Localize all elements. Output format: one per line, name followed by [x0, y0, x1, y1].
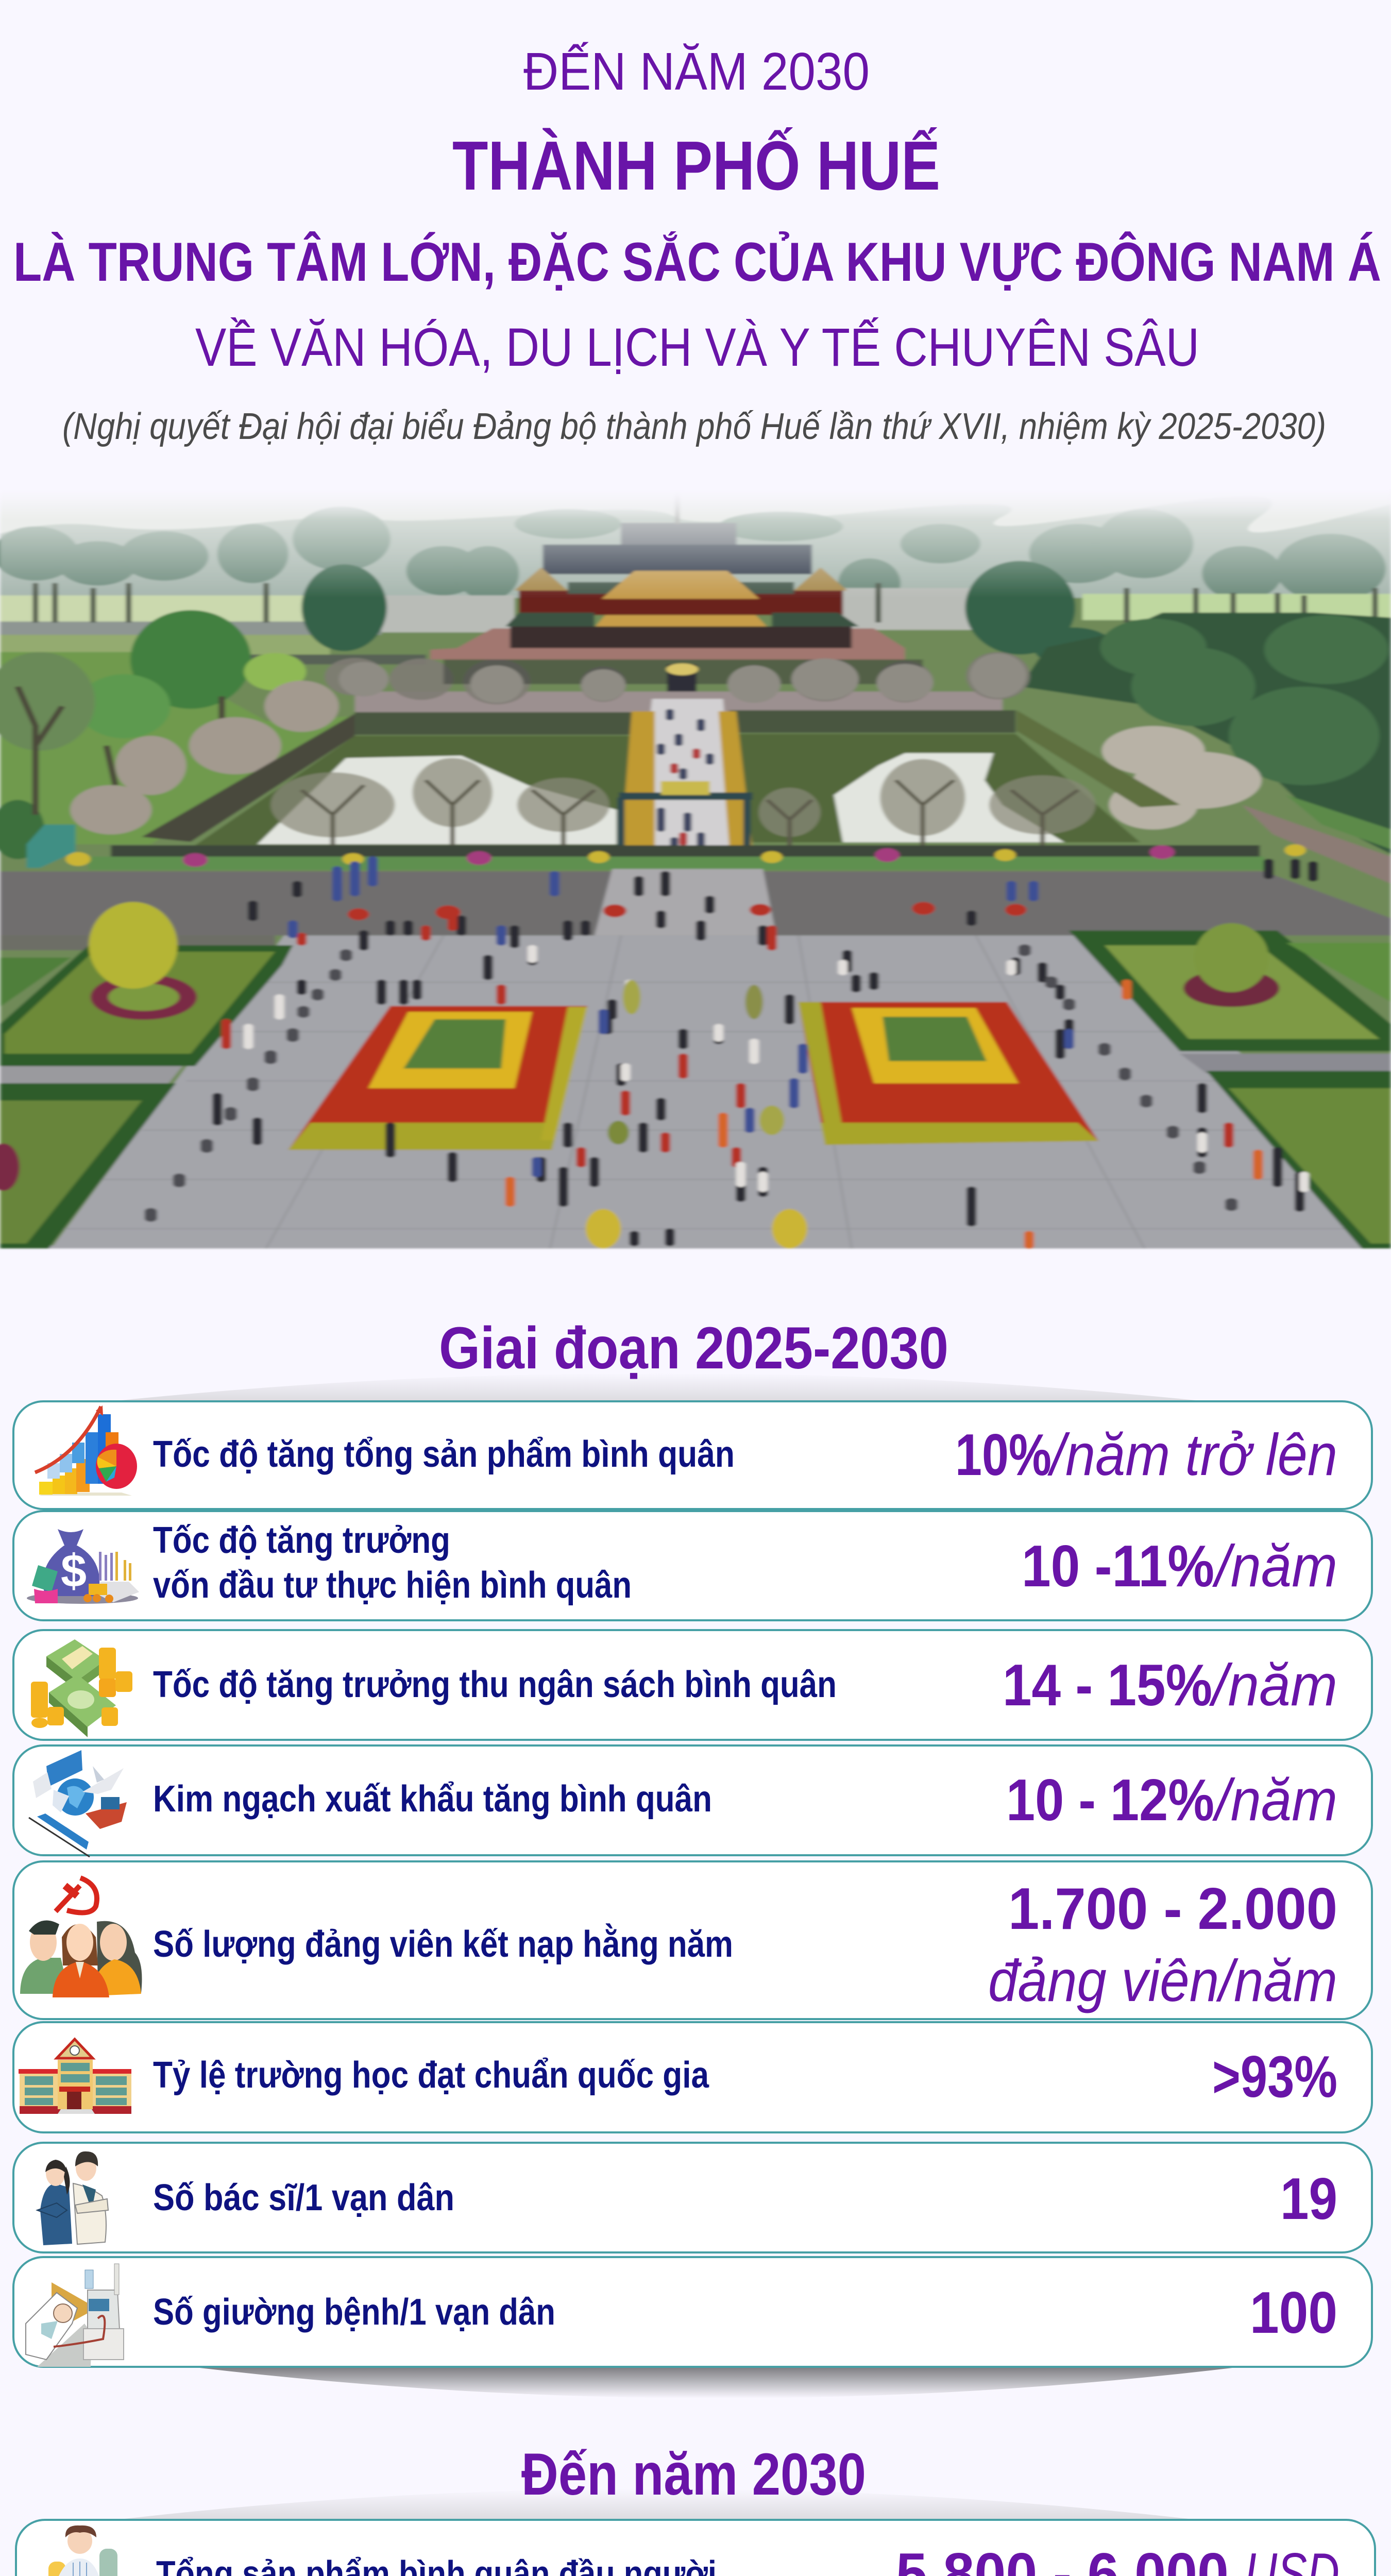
- row: kim ngạch xuất khẩu: [13, 1745, 1372, 1857]
- value: [1022, 1534, 1337, 1599]
- dark main trees: [301, 561, 1113, 667]
- bare reflected trees: [270, 758, 1096, 837]
- moat walls: [355, 712, 640, 735]
- plaza road behind moat: [355, 691, 1003, 712]
- row: GRDP đầu người: [16, 2520, 1375, 2576]
- row: trường học: [13, 2022, 1372, 2132]
- row: thu ngân sách: [13, 1630, 1372, 1740]
- value: 10 - 12%: [1006, 1768, 1214, 1833]
- label: Số bác sĩ/1 vạn dân: [153, 2177, 454, 2218]
- icon: person with piggy bank: [27, 2526, 130, 2576]
- flower beds: [289, 1006, 587, 1150]
- central bridge: [634, 699, 736, 849]
- row: bác sĩ: [13, 2143, 1372, 2252]
- title block: [13, 42, 1381, 447]
- panel: giai đoạn 2025-2030: [13, 1315, 1372, 2398]
- title line: THÀNH PHỐ HUẾ: THÀNH PHỐ HUẾ: [452, 127, 940, 205]
- label: [153, 1520, 632, 1606]
- icon: growth chart: [35, 1405, 137, 1496]
- lawns and roads behind palace: [0, 596, 306, 623]
- heading: Giai đoạn 2025-2030: Giai đoạn 2025-2030: [439, 1315, 948, 1381]
- value: đảng viên/năm: [988, 1948, 1337, 2014]
- far misty treeline: [0, 496, 1391, 598]
- ponds: [195, 736, 634, 845]
- panel: đến năm 2030: [16, 2442, 1375, 2576]
- icon: doctors: [37, 2151, 108, 2245]
- icon: cash and coins: [31, 1639, 132, 1737]
- value: [988, 1876, 1337, 2014]
- green strip with planters: [111, 845, 1260, 859]
- crowd: [151, 859, 1313, 1246]
- value: /năm trở lên: [1047, 1422, 1337, 1488]
- value: 10%: [955, 1422, 1051, 1488]
- row: tốc độ tăng trưởng vốn đầu tư: [13, 1511, 1372, 1620]
- label: Số lượng đảng viên kết nạp hằng năm: [153, 1923, 733, 1965]
- left bright trees and lawn: [0, 652, 355, 844]
- icon: party members: [20, 1878, 142, 1997]
- label: Tốc độ tăng trưởng thu ngân sách bình quân: [153, 1664, 837, 1705]
- heading: Đến năm 2030: Đến năm 2030: [521, 2442, 866, 2507]
- title line: văn hóa du lịch y tế: VỀ VĂN HÓA, DU LỊCH VÀ Y TẾ CHUYÊN SÂU: [195, 317, 1199, 378]
- icon: money bag: $: [61, 1546, 87, 1597]
- label: vốn đầu tư thực hiện bình quân: [153, 1565, 632, 1606]
- path on right: [1242, 805, 1391, 884]
- value: /năm: [1209, 1653, 1337, 1718]
- bare trees row: [325, 652, 1030, 704]
- palace: [621, 523, 736, 548]
- label: Tốc độ tăng tổng sản phẩm bình quân: [153, 1434, 735, 1475]
- row: giường bệnh: [13, 2257, 1372, 2367]
- value: 14 - 15%: [1003, 1653, 1212, 1718]
- icon: school building: [19, 2039, 131, 2114]
- value: >93%: [1212, 2044, 1337, 2110]
- bare trees in front of palace: [339, 654, 1026, 703]
- value: 100: [1250, 2280, 1337, 2346]
- heading shadow: [111, 1373, 1206, 1401]
- title line: ĐẾN NĂM 2030: ĐẾN NĂM 2030: [523, 42, 870, 101]
- lower plaza: [0, 936, 1391, 1248]
- icon: hospital bed and dialysis: [26, 2264, 124, 2367]
- right tree mass: [1020, 613, 1391, 854]
- label: Số giường bệnh/1 vạn dân: [153, 2292, 555, 2333]
- value: 19: [1280, 2166, 1337, 2232]
- icon: trade logistics: [29, 1750, 127, 1857]
- value: 10 -11%: [1022, 1534, 1214, 1599]
- row: số lượng đảng viên: [13, 1861, 1372, 2019]
- icon: money bag: [27, 1529, 139, 1604]
- value: 1.700 - 2.000: [1008, 1876, 1337, 1942]
- label: Tốc độ tăng trưởng: [153, 1520, 450, 1561]
- lawns: [0, 945, 293, 1066]
- row: tốc độ tăng tổng sản phẩm: [13, 1401, 1372, 1509]
- heading shadow: [115, 2488, 1198, 2520]
- bottom shadow: [191, 2367, 1241, 2398]
- label: Kim ngạch xuất khẩu tăng bình quân: [153, 1778, 712, 1820]
- label: Tỷ lệ trường học đạt chuẩn quốc gia: [153, 2055, 709, 2096]
- value: /năm: [1212, 1768, 1337, 1833]
- hero image: aerial view of Huế imperial citadel: [0, 489, 1391, 1248]
- upper plaza: [0, 871, 1391, 936]
- value: /năm: [1212, 1534, 1337, 1599]
